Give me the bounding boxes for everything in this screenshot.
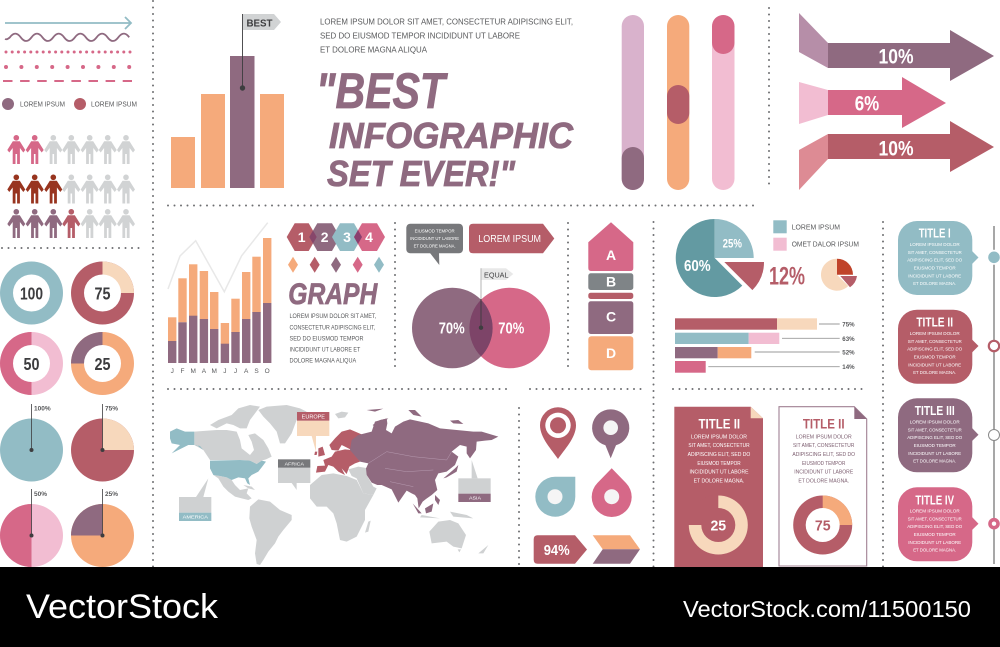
people row 1 [7, 135, 135, 164]
graph paragraph: LOREM IPSUM DOLOR SIT AMET, [290, 313, 376, 320]
horizontal bars: 63% [842, 336, 855, 343]
bubble: title IV: INCIDIDUNT UT LABORE [908, 540, 961, 546]
pie 50%: 50% [34, 491, 47, 498]
footer band: VectorStock.com/11500150 [683, 596, 971, 622]
card: filled title II: ET DOLORE MAGNA. [694, 478, 745, 484]
footer band: VectorStock [26, 588, 219, 626]
wave line [5, 34, 129, 41]
bubble: title IV: EIUSMOD TEMPOR [914, 532, 956, 538]
donut 100 [0, 262, 63, 324]
arrow: 10% mauve: 10% [878, 46, 914, 68]
intro text: SED DO EIUSMOD TEMPOR INCIDIDUNT UT LABORE [320, 32, 521, 40]
stacked bar chart: F [181, 368, 185, 375]
arrow: 10% rose [799, 121, 994, 190]
card: outlined title II: ADIPISCING ELIT, SED DO [792, 452, 856, 458]
arrow: 10% rose: 10% [878, 137, 914, 160]
pie 75%: 75% [105, 406, 118, 412]
bubble: title I: TITLE I [919, 226, 951, 240]
intro text: LOREM IPSUM DOLOR SIT AMET, CONSECTETUR ADIPISCING ELIT, [320, 18, 573, 26]
card: filled title II: SIT AMET, CONSECTETUR [688, 443, 750, 449]
numbered hexagons: 3 [343, 229, 351, 245]
pie 50% [0, 489, 63, 567]
numbered hexagons: 4 [365, 229, 373, 245]
bubble: title IV: LOREM IPSUM DOLOR [910, 508, 960, 514]
bubble: title II: EIUSMOD TEMPOR [914, 354, 956, 360]
pie legend: LOREM IPSUM [792, 222, 840, 232]
title: SET EVER!" [327, 153, 516, 194]
bubble: title I: SIT AMET, CONSECTETUR [908, 250, 962, 256]
card: outlined title II: SIT AMET, CONSECTETUR [793, 443, 854, 449]
pie legend: OMET DALOR IPSUM [792, 240, 859, 248]
venn diagram: EQUAL [484, 272, 509, 280]
numbered hexagons: 1 [298, 229, 306, 245]
diamond row [288, 257, 384, 273]
horizontal bars: 75% [842, 322, 855, 328]
pie chart: 60 25 12: 60% [684, 258, 711, 275]
pie 100%: 100% [34, 406, 51, 412]
stacked bar chart: J [223, 368, 227, 375]
card: filled title II [674, 407, 763, 567]
bubble: title I: INCIDIDUNT UT LABORE [908, 274, 961, 280]
title: "BEST [316, 63, 449, 119]
stacked ABCD labels: D [606, 345, 616, 361]
stacked ABCD labels: C [606, 308, 616, 324]
card: filled title II: INCIDIDUNT UT LABORE [690, 470, 749, 476]
heading: graph: GRAPH [288, 278, 378, 311]
card: filled title II: 25 [710, 517, 726, 534]
icon: chevron [593, 535, 640, 564]
arrow: 10% mauve [799, 13, 994, 81]
callout: grey speech bubble: EIUSMOD TEMPOR [415, 228, 455, 234]
callout: africa: AFRICA [285, 462, 305, 468]
small dotted line [6, 50, 131, 54]
graph paragraph: DOLORE MAGNA ALIQUA [290, 358, 357, 364]
card: outlined title II: INCIDIDUNT UT LABORE [794, 470, 854, 476]
donut 25: 25 [94, 354, 111, 374]
callout: grey speech bubble: ET DOLORE MAGNA. [414, 244, 456, 248]
venn diagram: 70% [498, 320, 524, 338]
callout: africa [278, 459, 310, 490]
bubble: title II: ET DOLORE MAGNA. [913, 370, 956, 376]
graph paragraph [290, 313, 376, 364]
people row 2 [7, 174, 135, 204]
bar chart: best [171, 14, 284, 188]
tag: 94%: 94% [544, 542, 570, 559]
pie 25%: 25% [105, 491, 118, 498]
bubble: title II: SIT AMET, CONSECTETUR [908, 339, 962, 345]
pie chart: 60 25 12 [676, 219, 805, 297]
people row 3 [7, 209, 135, 238]
donut 50 [0, 332, 63, 395]
bubble: title I: LOREM IPSUM DOLOR [910, 242, 960, 248]
numbered hexagons: 2 [321, 229, 329, 245]
card: outlined title II [779, 407, 867, 566]
callout: asia [458, 460, 491, 502]
bubble: title III: LOREM IPSUM DOLOR [910, 420, 960, 426]
graph paragraph: CONSECTETUR ADIPISCING ELIT, [290, 324, 375, 331]
stacked bar chart [168, 223, 271, 375]
bubble: title II: ADIPISCING ELIT, SED DO [907, 347, 962, 353]
stacked bar chart: M [190, 368, 196, 375]
stacked ABCD labels [588, 222, 633, 370]
title: INFOGRAPHIC [329, 115, 574, 156]
timeline [986, 226, 1000, 564]
arrow: 6% pink [799, 77, 946, 128]
bubble: title IV: TITLE IV [915, 492, 954, 507]
bubble: title III: INCIDIDUNT UT LABORE [908, 451, 961, 457]
card: outlined title II: LOREM IPSUM DOLOR [796, 434, 852, 440]
vertical pill 3 [712, 15, 734, 190]
stacked bar chart: J [234, 368, 237, 375]
graph paragraph: INCIDIDUNT UT LABORE ET [290, 346, 360, 354]
vertical pill 1 [622, 15, 644, 190]
bubble: title III: EIUSMOD TEMPOR [914, 443, 956, 449]
callout: america [179, 478, 211, 521]
horizontal bars: 14% [842, 364, 855, 371]
donut 25 [71, 332, 134, 395]
stacked bar chart: J [171, 368, 174, 375]
stacked bar chart: M [211, 368, 217, 375]
tag: lorem ipsum: LOREM IPSUM [478, 234, 541, 245]
tag: lorem ipsum [469, 224, 554, 253]
world map [170, 405, 498, 565]
callout: america: AMERICA [183, 515, 209, 521]
legend: LOREM IPSUM [20, 102, 65, 108]
intro text: ET DOLORE MAGNA ALIQUA [320, 46, 428, 54]
numbered hexagons [287, 223, 385, 251]
card: outlined title II: TITLE II [803, 415, 845, 431]
venn diagram [412, 268, 550, 368]
horizontal bars: 52% [842, 350, 855, 356]
bubble: title IV: ET DOLORE MAGNA. [913, 548, 956, 554]
icon: teal drop [535, 477, 575, 517]
bubble: title I: EIUSMOD TEMPOR [914, 266, 956, 272]
card: outlined title II: EIUSMOD TEMPOR [802, 461, 845, 467]
stacked bar chart: O [265, 368, 270, 375]
bar chart: best: BEST [246, 18, 273, 30]
pie chart: 60 25 12: 12% [769, 262, 805, 290]
icon: rose map pin [540, 407, 576, 459]
icon: pink drop [592, 468, 632, 517]
bubble: title I [898, 221, 978, 295]
title [316, 63, 574, 194]
bubble: title I: ET DOLORE MAGNA. [913, 281, 956, 287]
pie 25% [71, 489, 134, 567]
venn diagram: 70% [439, 320, 465, 338]
bubble: title III: ADIPISCING ELIT, SED DO [907, 435, 962, 441]
tag: 94% [534, 535, 587, 564]
callout: grey speech bubble: INCIDIDUNT UT LABORE [410, 236, 459, 241]
callout: asia: ASIA [469, 496, 482, 502]
large dotted line [6, 65, 130, 69]
arrow: teal line [5, 17, 131, 29]
pie 75% [71, 404, 134, 482]
stacked bar chart: S [254, 368, 259, 375]
horizontal bars [675, 318, 855, 373]
bubble: title IV: SIT AMET, CONSECTETUR [908, 516, 962, 522]
bubble: title III [898, 398, 978, 472]
stacked bar chart: A [202, 368, 207, 375]
callout: europe: EUROPE [302, 415, 325, 421]
card: filled title II: TITLE II [698, 415, 740, 431]
bubble: title IV [898, 487, 978, 561]
bubble: title II: TITLE II [916, 314, 953, 330]
card: outlined title II: 75 [815, 517, 831, 534]
card: filled title II: LOREM IPSUM DOLOR [691, 434, 747, 440]
arrow: 6% pink: 6% [855, 93, 880, 116]
callout: grey speech bubble [406, 224, 463, 265]
bubble: title II: INCIDIDUNT UT LABORE [908, 362, 961, 368]
card: outlined title II: ET DOLORE MAGNA. [798, 478, 849, 484]
bubble: title II: LOREM IPSUM DOLOR [910, 331, 960, 337]
donut 50: 50 [24, 354, 40, 374]
footer band [0, 567, 1000, 647]
legend [2, 98, 137, 110]
pie legend [773, 220, 859, 251]
bubble: title I: ADIPISCING ELIT, SED DO [907, 258, 962, 264]
legend: LOREM IPSUM [91, 102, 137, 108]
intro text [320, 18, 573, 54]
bubble: title IV: ADIPISCING ELIT, SED DO [907, 524, 962, 530]
pie chart: 60 25 12: 25% [723, 236, 742, 250]
graph paragraph: SED DO EIUSMOD TEMPOR [290, 335, 364, 342]
pie 100% [0, 404, 63, 482]
card: filled title II: EIUSMOD TEMPOR [697, 461, 741, 467]
donut 75 [71, 262, 134, 324]
bubble: title III: ET DOLORE MAGNA. [913, 459, 956, 465]
bubble: title II [898, 310, 978, 384]
vertical pill 2 [667, 15, 689, 190]
line styles sample [3, 17, 132, 81]
donut 75: 75 [94, 283, 111, 303]
callout: europe [297, 412, 329, 452]
stacked ABCD labels: B [606, 274, 616, 290]
stacked ABCD labels: A [606, 247, 616, 263]
bubble: title III: TITLE III [915, 403, 955, 418]
small pie chart [821, 259, 857, 291]
icon: mauve map pin [592, 409, 629, 458]
bubble: title III: SIT AMET, CONSECTETUR [908, 427, 962, 433]
stacked bar chart: A [244, 368, 249, 375]
card: filled title II: ADIPISCING ELIT, SED DO [688, 452, 751, 458]
donut 100: 100 [20, 283, 43, 303]
dashed line [3, 80, 132, 82]
